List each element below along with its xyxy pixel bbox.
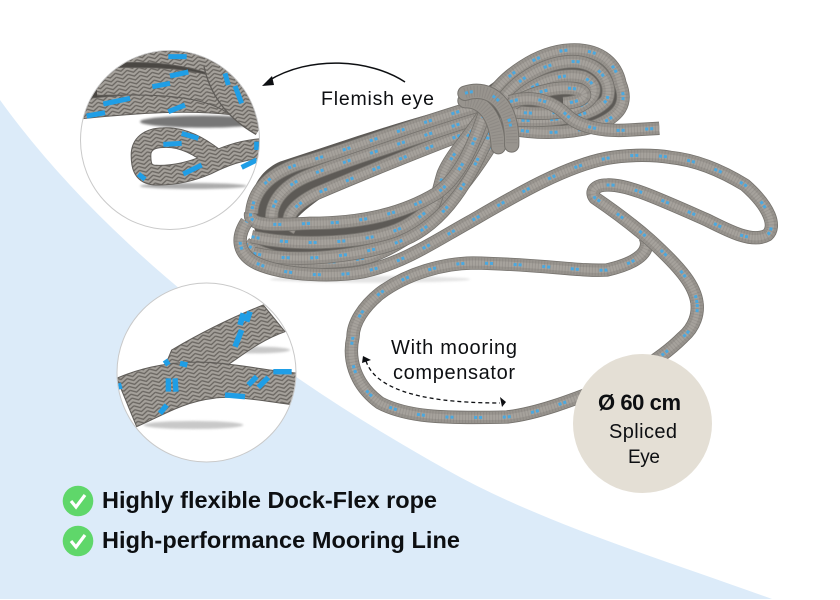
- upper coil strands: [490, 50, 623, 132]
- label: with mooring compensator: compensator: [393, 362, 515, 384]
- inset: mooring compensator splice close-up: [117, 283, 300, 462]
- label: flemish eye: Flemish eye: [321, 88, 434, 110]
- upper coil underlay: [483, 48, 627, 135]
- spliced eye label: Spliced: [609, 421, 677, 443]
- lower coil underlay: [250, 100, 497, 263]
- product photo: coiled rope with spliced eye: [240, 48, 771, 417]
- label: with mooring compensator: With mooring: [391, 337, 517, 359]
- inset: flemish eye close-up: [73, 47, 267, 229]
- feature 2: high-performance line: [63, 526, 460, 556]
- icon: green check: [63, 526, 93, 556]
- long rope: spliced eye loop and run to coil: [240, 155, 771, 303]
- feature text 1: Highly flexible Dock-Flex rope: [102, 487, 437, 513]
- callout circle: spliced eye size: Eye: [628, 447, 660, 468]
- feature 1: highly flexible rope: [63, 486, 437, 516]
- lower coil strands: [245, 103, 500, 262]
- free rope tail with flemish eye: [510, 99, 659, 130]
- knot wrap around the coil: [465, 91, 512, 147]
- arrow: flemish eye to inset: [262, 63, 405, 86]
- label: with mooring compensator: [391, 337, 517, 384]
- icon: green check: [63, 486, 93, 516]
- feature text 2: High-performance Mooring Line: [102, 527, 460, 553]
- diameter value: Ø 60 cm: [598, 390, 681, 415]
- dashed double arrow: compensator length: [362, 356, 506, 407]
- long rope: lower loop: [351, 237, 697, 417]
- callout circle: spliced eye size: [573, 354, 712, 493]
- coil ground shadow: [270, 276, 470, 283]
- background: light blue curved area: [0, 100, 772, 599]
